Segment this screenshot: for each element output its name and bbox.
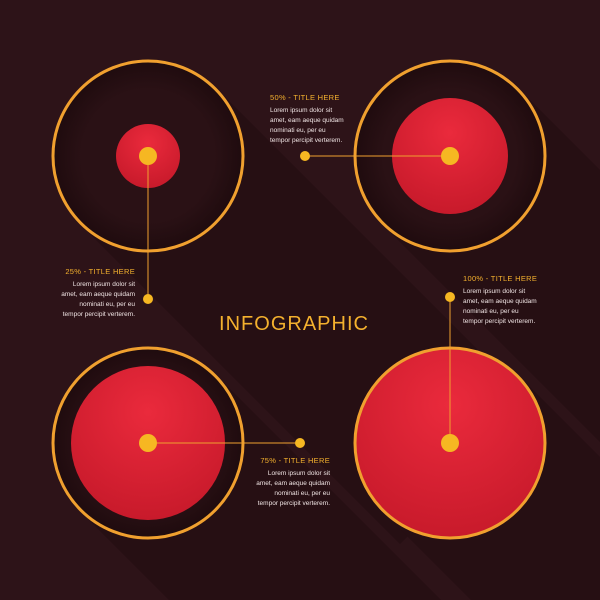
text: 25% <box>61 267 135 318</box>
text: 75%: 75% - TITLE HERE <box>260 456 330 465</box>
circle: top-left 25% <box>53 61 243 304</box>
text: 75%: nominati eu, per eu <box>274 490 330 497</box>
text: 50%: tempor percipit verterem. <box>270 137 342 144</box>
text: 25%: tempor percipit verterem. <box>63 311 135 318</box>
text: 50%: amet, eam aeque quidam <box>270 117 344 124</box>
text: 50%: nominati eu, per eu <box>270 127 326 134</box>
text: 25%: Lorem ipsum dolor sit <box>73 281 135 288</box>
text: 100%: 100% - TITLE HERE <box>463 274 537 283</box>
text: 75% <box>256 456 330 507</box>
text: 50% <box>270 93 344 144</box>
long shadows <box>80 88 600 600</box>
text: 100%: amet, eam aeque quidam <box>463 298 537 305</box>
title: INFOGRAPHIC <box>219 313 369 335</box>
text: 50%: 50% - TITLE HERE <box>270 93 340 102</box>
text: 100%: nominati eu, per eu <box>463 308 519 315</box>
text: 25%: nominati eu, per eu <box>79 301 135 308</box>
circle: bottom-left 75% <box>53 348 305 538</box>
text: 50%: Lorem ipsum dolor sit <box>270 107 332 114</box>
circle: top-right 50% <box>300 61 545 251</box>
text: 75%: Lorem ipsum dolor sit <box>268 470 330 477</box>
text: 75%: tempor percipit verterem. <box>258 500 330 507</box>
text: 75%: amet, eam aeque quidam <box>256 480 330 487</box>
text: 100%: tempor percipit verterem. <box>463 318 535 325</box>
text: 25%: amet, eam aeque quidam <box>61 291 135 298</box>
text: 25%: 25% - TITLE HERE <box>65 267 135 276</box>
text: 100% <box>463 274 537 325</box>
circle: bottom-right 100% <box>355 292 545 538</box>
text: 100%: Lorem ipsum dolor sit <box>463 288 525 295</box>
